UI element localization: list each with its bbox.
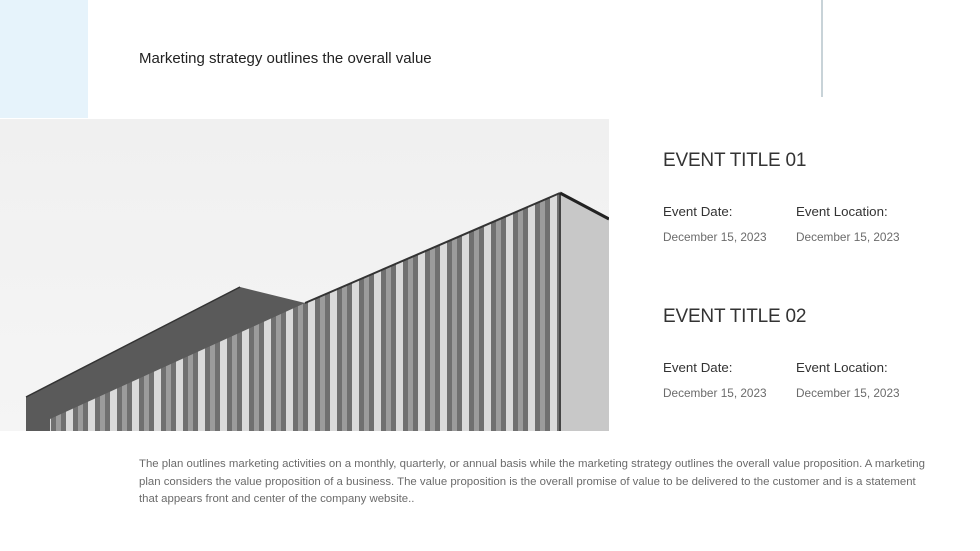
event 02 date [663,360,767,400]
event 02 date: December 15, 2023 [663,386,767,400]
event 01 location: Event Location: [796,204,888,219]
event 02 date: Event Date: [663,360,732,375]
event 01 date: Event Date: [663,204,732,219]
event 02 location: Event Location: [796,360,888,375]
vertical accent line [821,0,823,97]
heading: Marketing strategy outlines the overall value [139,50,432,67]
main facade [50,193,560,431]
event 02 [663,306,900,400]
accent block: light blue [0,0,88,118]
body paragraph: The plan outlines marketing activities on a monthly, quarterly, or annual basis while the marketing strategy outlines the overall value proposition. A marketing [139,458,925,470]
body paragraph: that appears front and center of the company website.. [139,493,414,505]
event 01 location: December 15, 2023 [796,230,900,244]
event 02 location [796,360,900,400]
event title 01: EVENT TITLE 01 [663,150,806,171]
event 01 date [663,204,767,244]
event 01 location [796,204,900,244]
left block [26,287,305,431]
event title 02: EVENT TITLE 02 [663,306,806,327]
body paragraph: plan considers the value proposition of a business. The value proposition is the overall promise of value to be delivered to the customer and is a statement [139,476,916,488]
body paragraph [139,458,925,505]
event 02 location: December 15, 2023 [796,386,900,400]
photo: building [0,119,609,431]
event 01 date: December 15, 2023 [663,230,767,244]
event 01 [663,150,900,244]
side face [560,193,609,431]
